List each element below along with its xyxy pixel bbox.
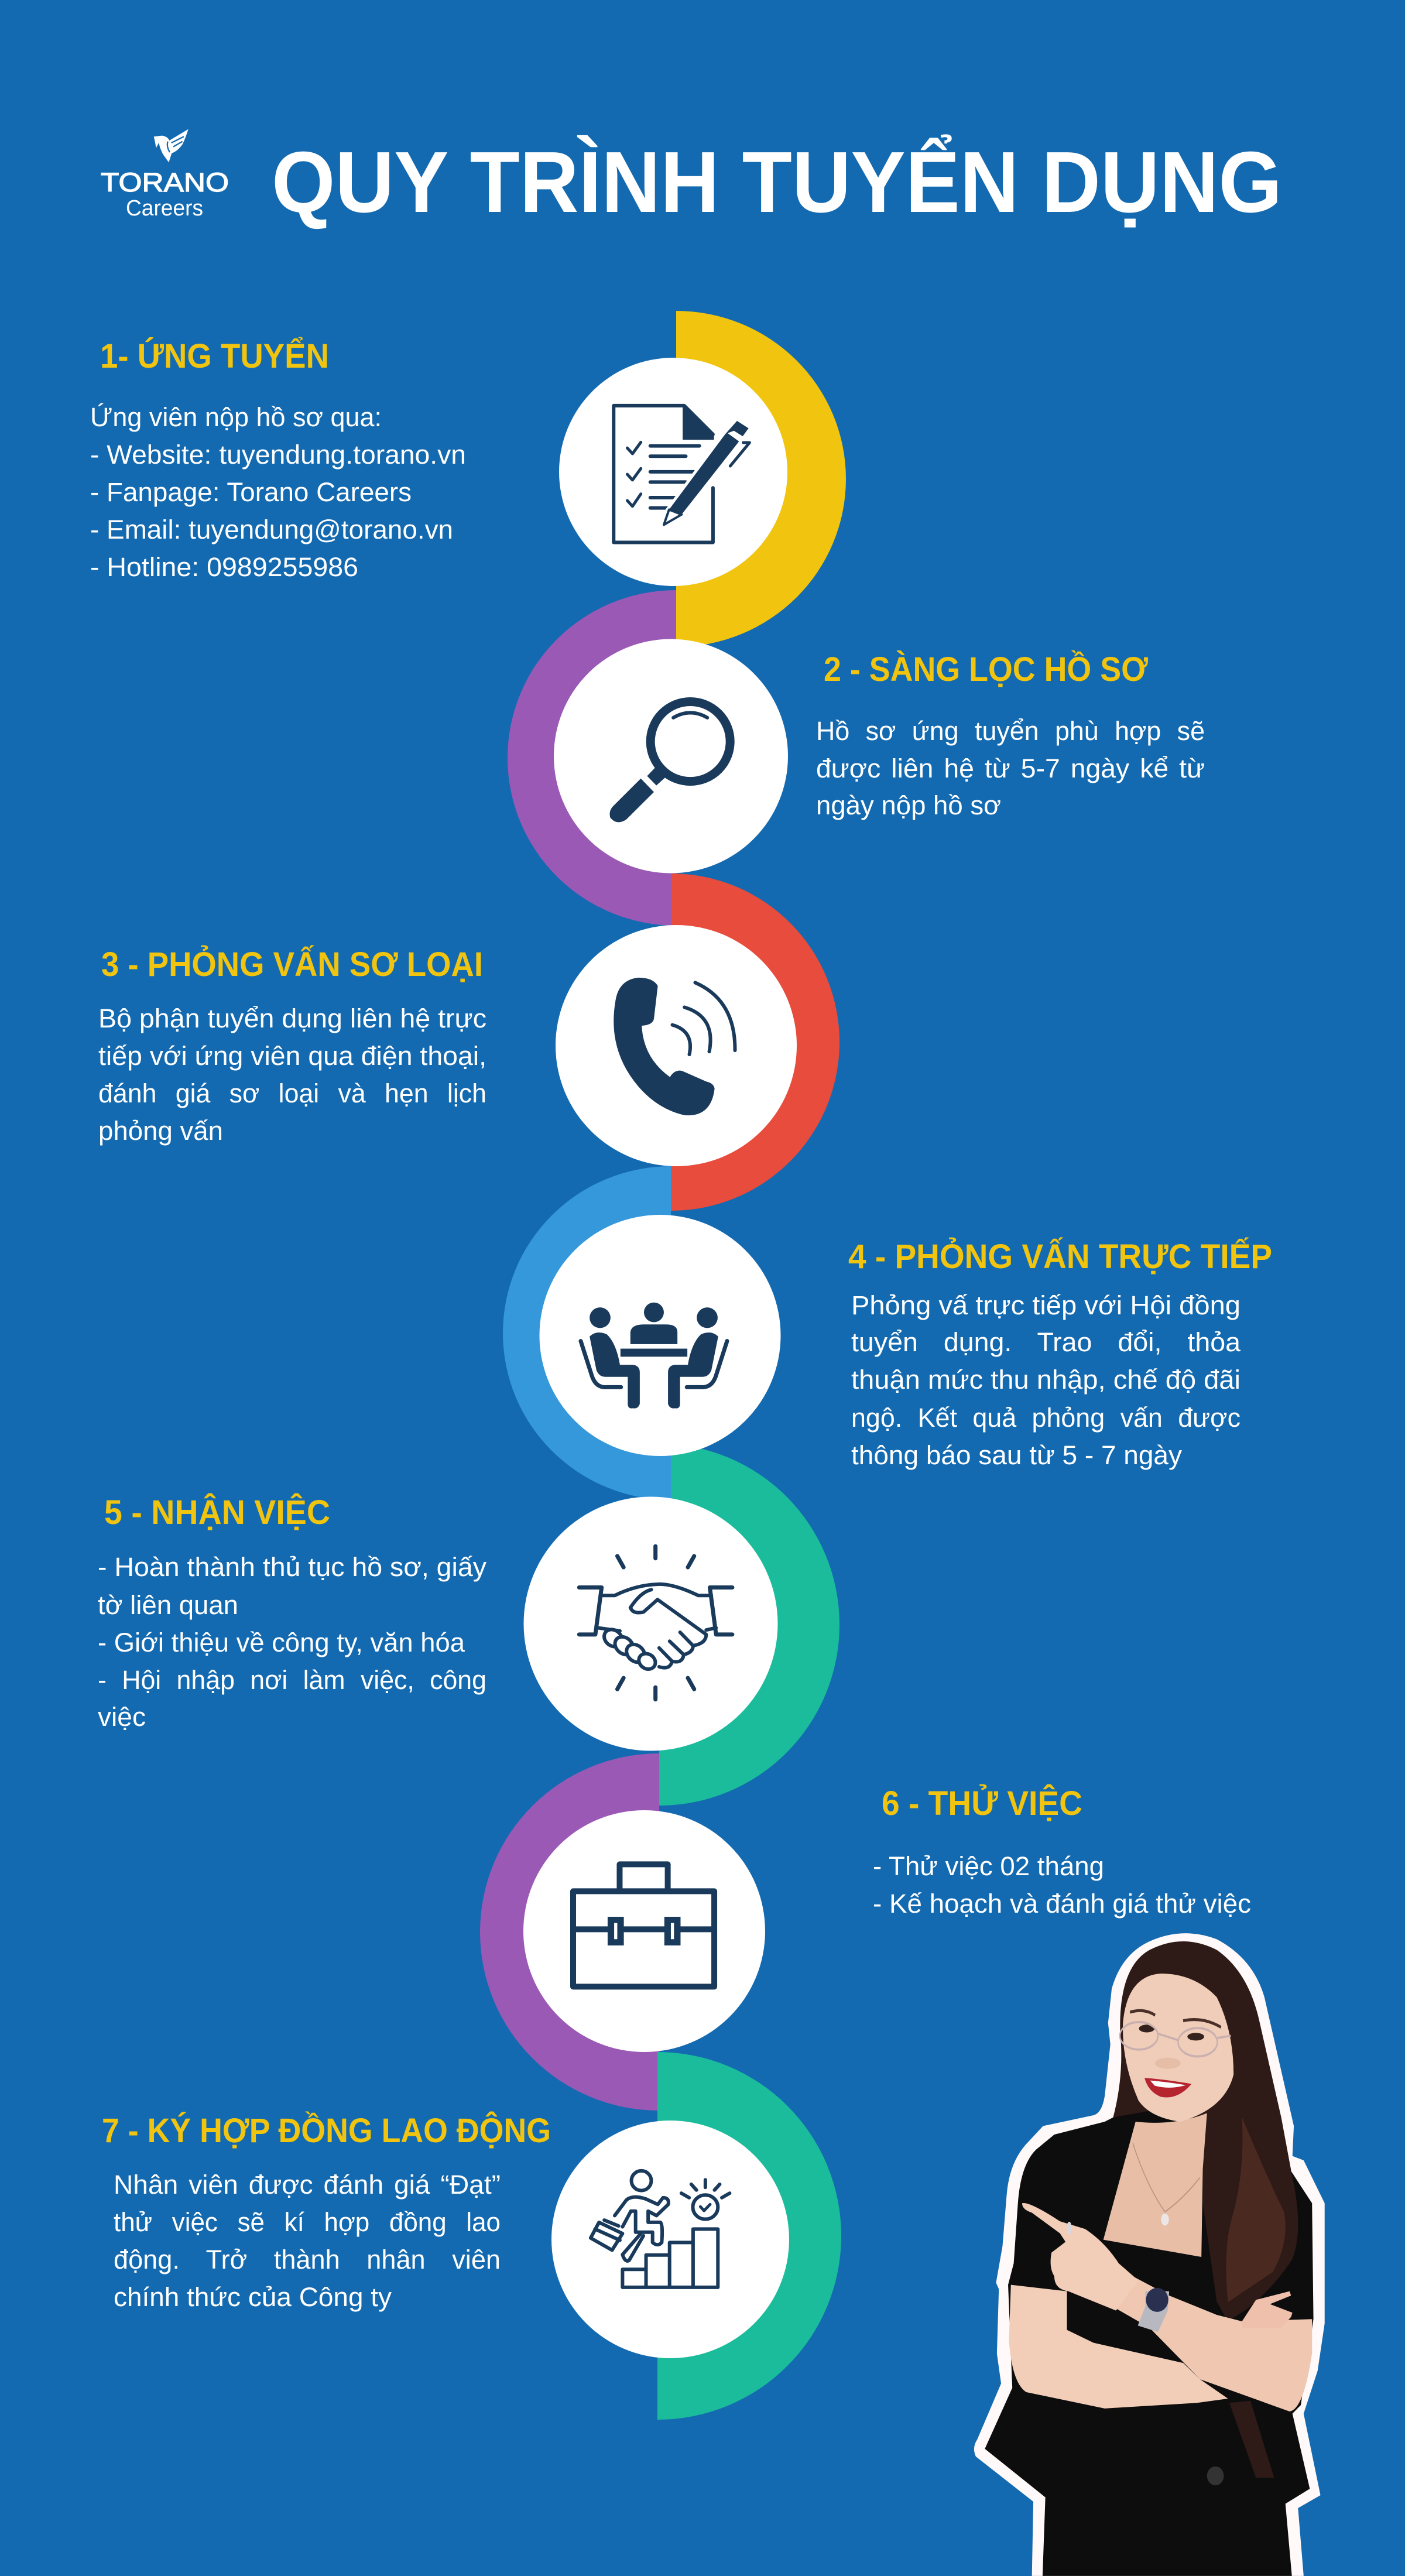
- body: step 2: ngày nộp hồ sơ: [816, 790, 1001, 820]
- body: step 6: - Thử việc 02 tháng: [873, 1851, 1104, 1881]
- icon: handshake: [579, 1546, 732, 1700]
- body: step 7: chính thức của Công ty: [114, 2282, 392, 2312]
- jacket button: [1207, 2467, 1224, 2485]
- icon: career steps: [591, 2171, 729, 2287]
- step 4 text: [848, 1238, 1272, 1470]
- logo: Torano Careers: [101, 129, 229, 221]
- eyebrows and eyes: [1130, 2010, 1221, 2027]
- icon: interview table: [581, 1303, 727, 1409]
- body: step 5: - Hoàn thành thủ tục hồ sơ, giấy: [98, 1552, 487, 1582]
- body: step 4: thông báo sau từ 5 - 7 ngày: [851, 1440, 1183, 1470]
- spine of coloured half circles: [480, 311, 846, 2420]
- heading: step 3: 3 - PHỎNG VẤN SƠ LOẠI: [101, 946, 483, 984]
- nose shadow: [1155, 2058, 1181, 2069]
- body: step 3: tiếp với ứng viên qua điện thoại,: [98, 1041, 486, 1071]
- crossed arm: [1116, 2276, 1312, 2411]
- white circles: [523, 358, 797, 2358]
- logo: Torano Careers: Careers: [126, 196, 203, 221]
- body: step 7: [114, 2170, 501, 2312]
- logo: Torano Careers: TORANO: [101, 167, 229, 197]
- body: step 3: đánh giá sơ loại và hẹn lịch: [98, 1078, 486, 1108]
- body: step 6: - Kế hoạch và đánh giá thử việc: [873, 1889, 1251, 1919]
- resting fingers: [1242, 2291, 1293, 2328]
- icon: pegasus: [154, 129, 189, 162]
- icon: briefcase: [573, 1864, 714, 1986]
- glasses: [1120, 2022, 1231, 2057]
- body: step 1: - Fanpage: Torano Careers: [90, 477, 412, 507]
- heading: step 2: 2 - SÀNG LỌC HỒ SƠ: [824, 650, 1148, 688]
- icon: application form and pen: [614, 406, 749, 543]
- black outfit: [985, 2105, 1314, 2576]
- body: step 1: Ứng viên nộp hồ sơ qua:: [90, 402, 382, 432]
- pointing hand: [1022, 2203, 1139, 2311]
- step 3 text: [98, 946, 486, 1146]
- body: step 1: - Email: tuyendung@torano.vn: [90, 515, 453, 544]
- step 1 text: [90, 337, 466, 582]
- step 5 text: [98, 1493, 487, 1732]
- step 7 text: [102, 2112, 551, 2312]
- step 2 text: [816, 650, 1205, 820]
- lower forearm: [1009, 2285, 1228, 2409]
- body: step 4: ngộ. Kết quả phỏng vấn được: [851, 1403, 1240, 1433]
- body: step 2: được liên hệ từ 5-7 ngày kể từ: [816, 753, 1205, 783]
- step 6 text: [873, 1784, 1251, 1919]
- body: step 5: việc: [98, 1702, 146, 1732]
- body: step 5: tờ liên quan: [98, 1590, 238, 1620]
- body: step 1: - Website: tuyendung.torano.vn: [90, 440, 466, 470]
- title: QUY TRÌNH TUYỂN DỤNG: [272, 134, 1282, 231]
- body: step 2: [816, 716, 1205, 820]
- neck and chest: [1104, 2113, 1207, 2257]
- necklace: [1133, 2143, 1200, 2212]
- body: step 7: Nhân viên được đánh giá “Đạt”: [114, 2170, 501, 2200]
- watch: [1138, 2291, 1169, 2332]
- body: step 7: thử việc sẽ kí hợp đồng lao: [114, 2207, 501, 2237]
- body: step 3: [98, 1003, 486, 1146]
- white sticker outline: [974, 1933, 1325, 2576]
- lips: [1144, 2078, 1191, 2097]
- body: step 6: [873, 1851, 1251, 1919]
- heading: step 7: 7 - KÝ HỢP ĐỒNG LAO ĐỘNG: [102, 2112, 551, 2150]
- icon: magnifying glass: [610, 702, 730, 822]
- body: step 5: - Giới thiệu về công ty, văn hóa: [98, 1628, 465, 1657]
- body: step 2: Hồ sơ ứng tuyển phù hợp sẽ: [816, 716, 1205, 746]
- body: step 1: [90, 402, 466, 582]
- body: step 7: động. Trở thành nhân viên: [114, 2245, 501, 2274]
- body: step 4: Phỏng vấ trực tiếp với Hội đồng: [851, 1290, 1240, 1320]
- body: step 4: thuận mức thu nhập, chế độ đãi: [851, 1365, 1240, 1395]
- lower hair: [1229, 2401, 1274, 2478]
- icon: telephone: [614, 978, 735, 1115]
- hair: [1113, 1941, 1298, 2321]
- hair highlight: [1226, 2118, 1286, 2302]
- ring: [1067, 2222, 1072, 2235]
- presenter illustration: [974, 1933, 1325, 2576]
- body: step 4: [851, 1290, 1241, 1470]
- heading: step 6: 6 - THỬ VIỆC: [882, 1784, 1082, 1823]
- body: step 3: Bộ phận tuyển dụng liên hệ trực: [98, 1003, 486, 1033]
- body: step 1: - Hotline: 0989255986: [90, 552, 358, 582]
- face: [1123, 1974, 1233, 2122]
- body: step 4: tuyển dụng. Trao đổi, thỏa: [851, 1327, 1241, 1357]
- body: step 5: [98, 1552, 487, 1732]
- body: step 5: - Hội nhập nơi làm việc, công: [98, 1665, 486, 1695]
- heading: step 1: 1- ỨNG TUYỂN: [100, 337, 329, 375]
- heading: step 5: 5 - NHẬN VIỆC: [104, 1493, 330, 1532]
- body: step 3: phỏng vấn: [98, 1116, 223, 1146]
- heading: step 4: 4 - PHỎNG VẤN TRỰC TIẾP: [848, 1238, 1272, 1276]
